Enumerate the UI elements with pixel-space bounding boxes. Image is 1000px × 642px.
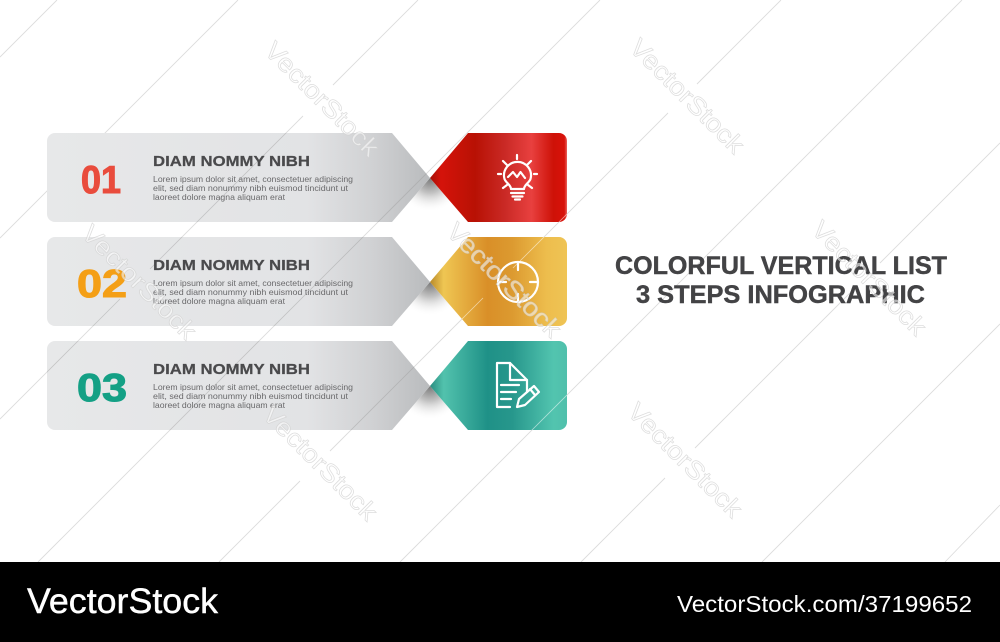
row 1 body text: laoreet dolore magna aliquam erat xyxy=(153,192,286,202)
row 2 body text: laoreet dolore magna aliquam erat xyxy=(153,296,286,306)
watermark: VectorStock xyxy=(441,217,567,344)
watermark lines over gray panels xyxy=(47,133,426,430)
step 3 content xyxy=(77,361,539,410)
step 1 content xyxy=(81,153,537,202)
row 1 colored tab xyxy=(430,133,567,222)
row 3 heading: DIAM NOMMY NIBH xyxy=(153,361,310,378)
icon: light bulb xyxy=(498,155,537,200)
watermark lines over colored tabs xyxy=(462,214,567,430)
row 3 number: 03 xyxy=(77,367,127,410)
title: COLORFUL VERTICAL LIST xyxy=(615,252,947,280)
row 2 heading: DIAM NOMMY NIBH xyxy=(153,257,310,274)
icon: document with pencil xyxy=(497,363,539,407)
row 3 xyxy=(47,341,567,430)
row 3 colored tab xyxy=(430,341,567,430)
title: 3 STEPS INFOGRAPHIC xyxy=(636,281,925,309)
watermark: VectorStock xyxy=(259,36,385,163)
title xyxy=(615,252,947,309)
watermark: VectorStock xyxy=(622,397,748,524)
row 1 number: 01 xyxy=(81,159,121,202)
watermark xyxy=(76,33,932,527)
watermark: VectorStock xyxy=(624,33,750,160)
footer image id: VectorStock.com/37199652 xyxy=(677,591,972,617)
row 3 body text: elit, sed diam nonummy nibh euismod tincidunt ut xyxy=(153,391,349,401)
row 1 xyxy=(47,133,567,222)
row 1 body text: Lorem ipsum dolor sit amet, consectetuer adipiscing xyxy=(153,174,353,184)
step 2 content xyxy=(77,257,538,306)
watermark: VectorStock xyxy=(76,219,202,346)
row 1 gray label panel xyxy=(47,133,430,222)
footer bar xyxy=(0,562,1000,642)
icon: target xyxy=(498,262,538,302)
row 2 body text: elit, sed diam nonummy nibh euismod tincidunt ut xyxy=(153,287,349,297)
row 2 shadow xyxy=(392,282,468,326)
row 1 body text: elit, sed diam nonummy nibh euismod tincidunt ut xyxy=(153,183,349,193)
row 1 shadow xyxy=(392,178,468,222)
watermark: VectorStock xyxy=(257,400,383,527)
watermark: VectorStock xyxy=(806,215,932,342)
row 2 colored tab xyxy=(430,237,567,326)
row 2 body text: Lorem ipsum dolor sit amet, consectetuer adipiscing xyxy=(153,278,353,288)
row 2 number: 02 xyxy=(77,263,127,306)
row 3 gray label panel xyxy=(47,341,430,430)
row 3 shadow xyxy=(392,386,468,430)
row 3 body text: Lorem ipsum dolor sit amet, consectetuer adipiscing xyxy=(153,382,353,392)
row 1 heading: DIAM NOMMY NIBH xyxy=(153,153,310,170)
row 3 body text: laoreet dolore magna aliquam erat xyxy=(153,400,286,410)
row 2 gray label panel xyxy=(47,237,430,326)
footer logo: VectorStock xyxy=(27,582,219,621)
row 2 xyxy=(47,237,567,326)
